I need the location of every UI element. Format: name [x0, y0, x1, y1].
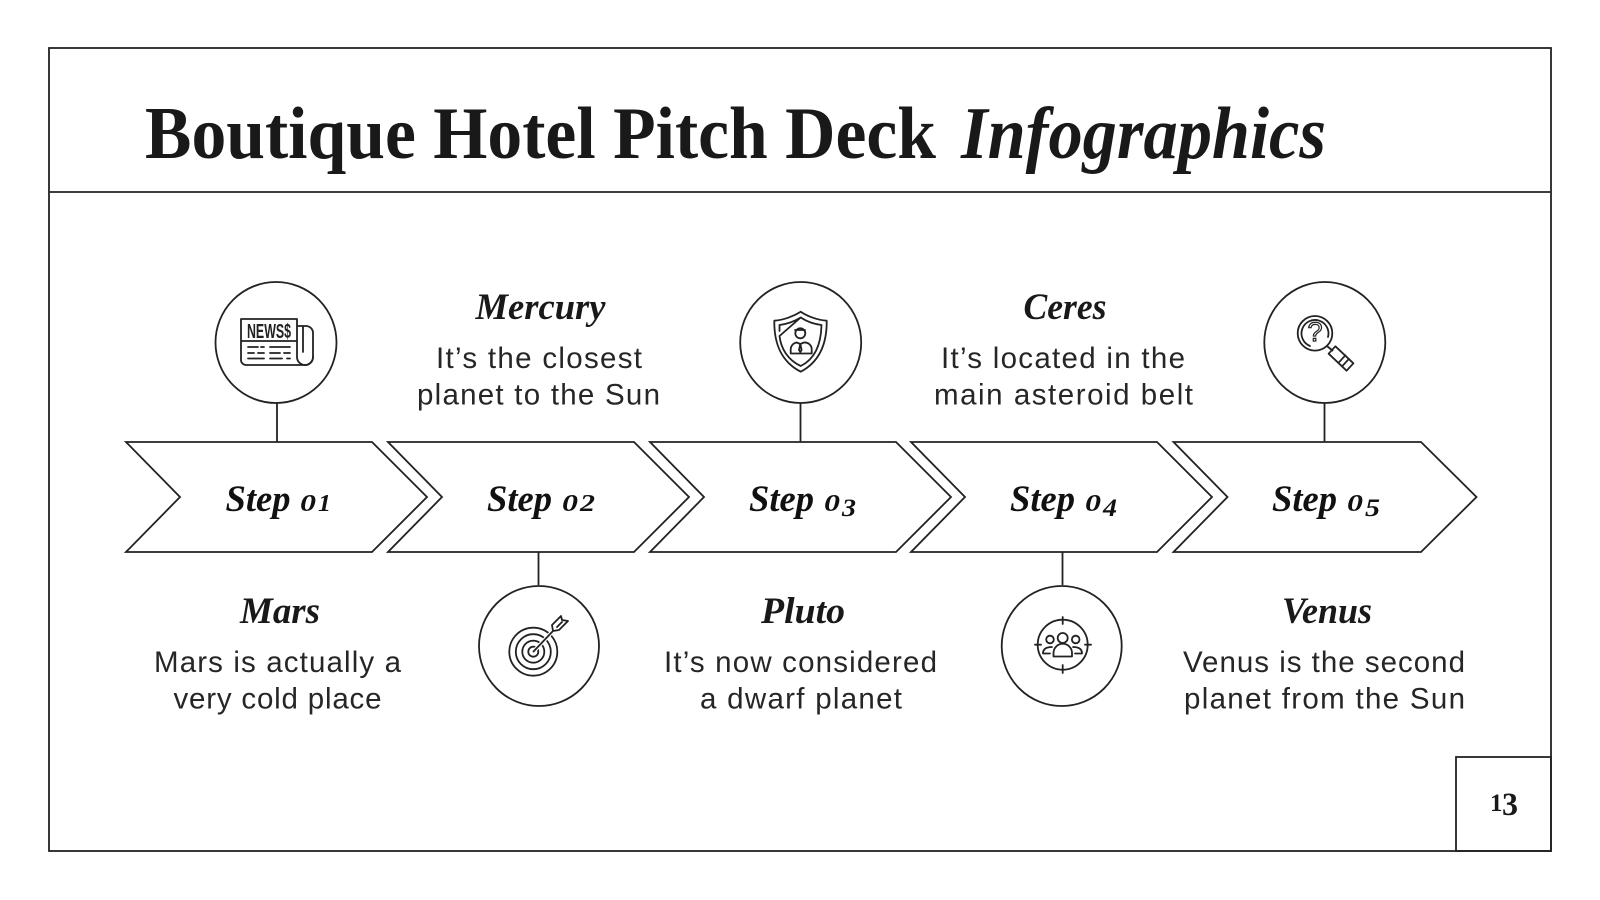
text: Venus: planet from the Sun [1184, 682, 1465, 716]
icon circle: audience target [1002, 586, 1122, 706]
icon circle: target [479, 586, 599, 706]
text: Mercury [417, 287, 660, 412]
text: Ceres: main asteroid belt [934, 378, 1193, 412]
arrow: step 03: 3 [841, 495, 856, 522]
step 03 group [650, 282, 951, 716]
text: Ceres [934, 287, 1193, 412]
text: Mars [154, 591, 402, 716]
arrow: step 03: Step [749, 479, 814, 520]
text: Mars: very cold place [174, 682, 382, 716]
page number box: 1 [1490, 790, 1502, 817]
step 04 group [911, 287, 1212, 706]
arrow: step 05: 0 [1347, 491, 1363, 517]
title: Boutique Hotel Pitch Deck [145, 93, 937, 175]
arrow: step 04: Step [1010, 479, 1075, 520]
title band divider [49, 191, 1551, 193]
arrow: step 01: 0 [300, 491, 316, 517]
arrow: step 02: 2 [579, 491, 595, 517]
icon circle: shield [740, 282, 861, 403]
text: Ceres: Ceres [1024, 287, 1106, 328]
arrow: step 02 [388, 442, 689, 552]
icon circle: magnifier: ? [1307, 317, 1323, 347]
text: Mercury: planet to the Sun [417, 378, 660, 412]
text: Pluto: Pluto [760, 591, 845, 632]
text: Pluto: It’s now considered [664, 646, 937, 679]
icon circle: newspaper [216, 282, 336, 403]
connector: step 04 [1062, 552, 1064, 585]
text: Pluto: a dwarf planet [700, 682, 902, 716]
arrow: step 03: 0 [824, 491, 840, 517]
connector: step 02 [538, 552, 540, 585]
connector: step 01 [276, 403, 278, 442]
arrow: step 05 [1174, 442, 1476, 552]
arrow: step 04: 0 [1085, 491, 1101, 517]
arrow: step 01 [126, 442, 427, 552]
arrow: step 02: Step [487, 479, 552, 520]
text: Mars: Mars [239, 591, 320, 632]
arrow: step 01: 1 [318, 491, 331, 517]
step 02 group [388, 287, 689, 706]
arrow: step 02: 0 [562, 491, 578, 517]
step 05 group [1174, 282, 1476, 716]
text: Mercury: It’s the closest [436, 342, 642, 375]
page number box [1456, 757, 1551, 851]
text: Venus [1183, 591, 1465, 716]
arrow: step 05: Step [1272, 479, 1337, 520]
text: Mars: Mars is actually a [154, 646, 402, 679]
arrow: step 03 [650, 442, 951, 552]
arrow: step 04: 4 [1102, 495, 1117, 522]
page number box: 3 [1502, 787, 1518, 823]
connector: step 03 [800, 403, 802, 442]
icon circle: magnifier [1264, 282, 1385, 403]
icon circle: newspaper: NEWS$ [247, 321, 291, 343]
text: Pluto [664, 591, 937, 716]
arrow: step 01: Step [226, 479, 290, 520]
text: Ceres: It’s located in the [941, 342, 1185, 375]
text: Venus: Venus is the second [1183, 646, 1465, 679]
step 01 group [126, 282, 427, 716]
connector: step 05 [1324, 403, 1326, 442]
text: Venus: Venus [1282, 591, 1372, 632]
text: Mercury: Mercury [475, 287, 606, 328]
arrow: step 04 [911, 442, 1212, 552]
title: Infographics [960, 93, 1326, 175]
arrow: step 05: 5 [1365, 495, 1380, 522]
